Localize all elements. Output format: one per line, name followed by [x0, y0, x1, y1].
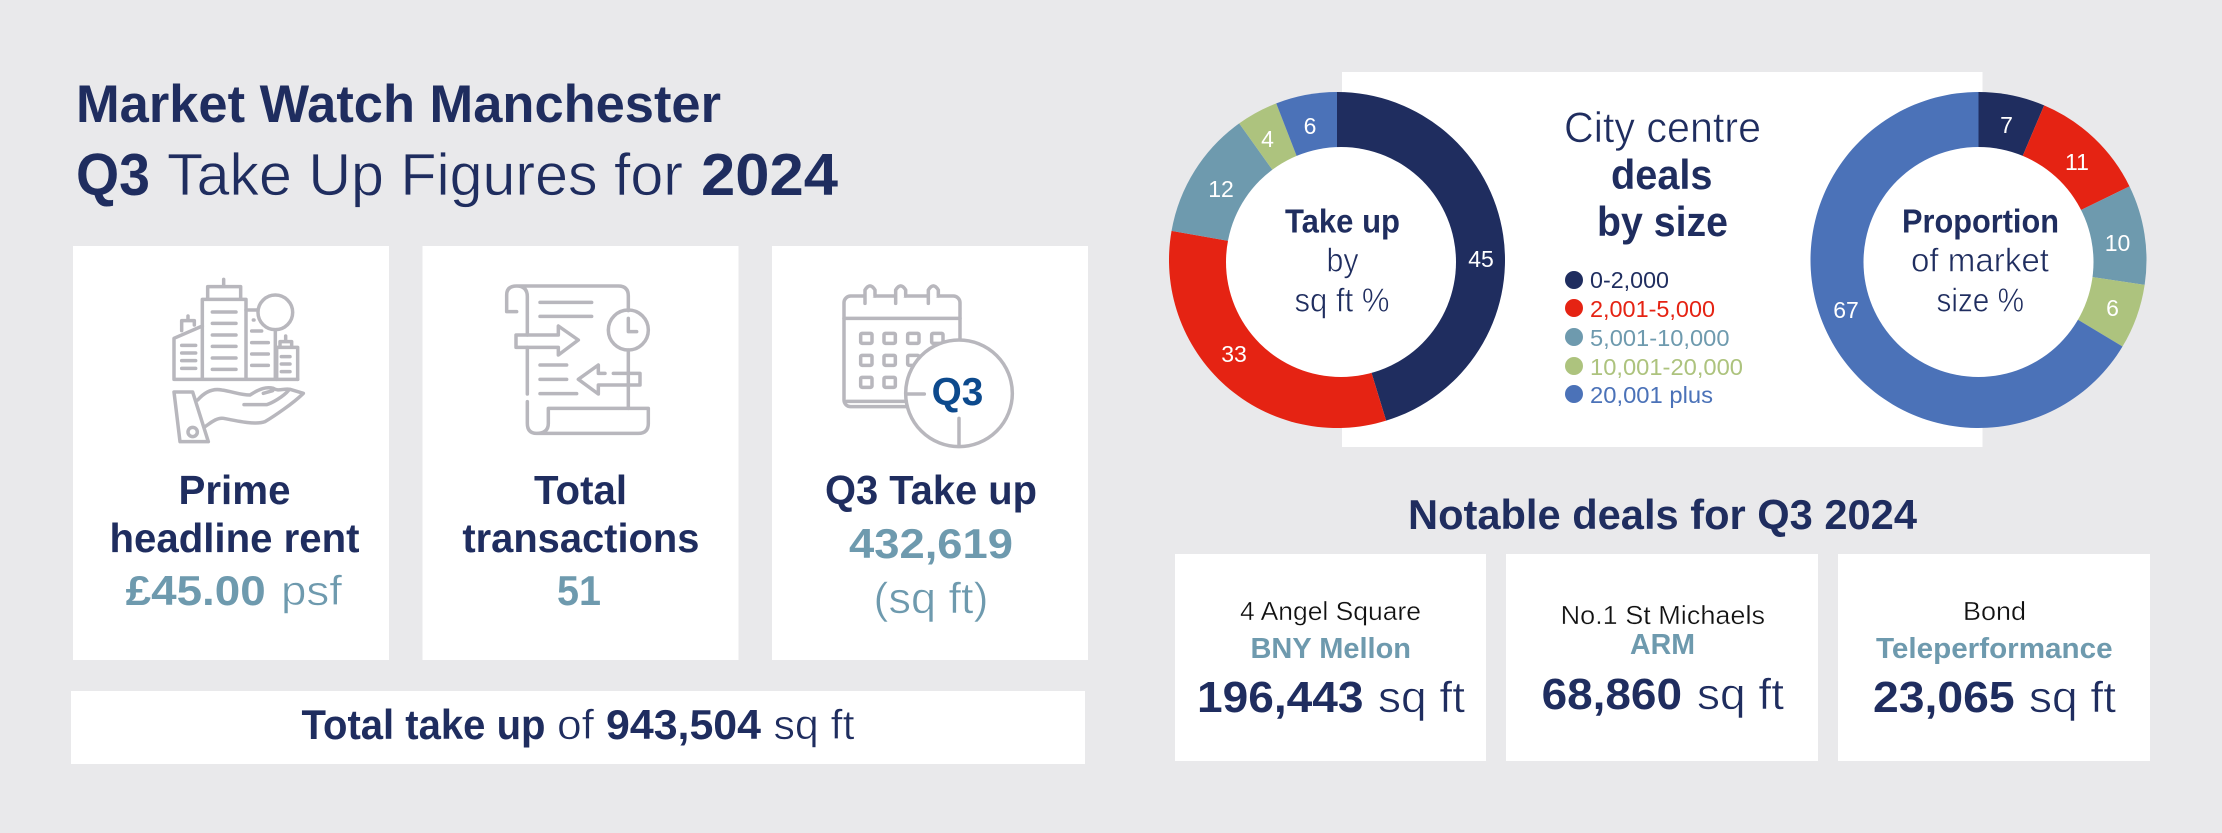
total take up banner: Total take up	[302, 701, 546, 748]
panel: deal 4 Angel Square: 4 Angel Square	[1240, 596, 1421, 626]
panel: prime headline rent	[73, 246, 389, 660]
panel: deal 4 Angel Square: sq ft	[1378, 673, 1465, 722]
panel: deal No.1 St Michaels: 68,860	[1542, 670, 1682, 719]
card text: total transactions: transactions	[462, 515, 699, 561]
card text: Q3 take up	[825, 467, 1037, 623]
total take up banner: of	[557, 701, 594, 748]
legend: 5,001-10,000	[1590, 325, 1730, 351]
panel heading	[1564, 104, 1761, 245]
donut chart: proportion of market size: 6	[2106, 295, 2119, 321]
panel: deal Bond: Teleperformance	[1876, 633, 2113, 665]
card text: total transactions: Total	[534, 467, 627, 513]
donut chart: take up by sq ft: 6	[1304, 113, 1316, 139]
donut centre label: take up	[1285, 202, 1400, 318]
card text: prime headline rent: psf	[281, 567, 342, 614]
card text: Q3 take up: 432,619	[849, 520, 1013, 567]
panel heading: deals	[1611, 151, 1712, 198]
title: Q3	[76, 142, 150, 208]
donut chart: proportion of market size: 10	[2105, 230, 2130, 256]
panel: deal Bond: Bond	[1963, 596, 2026, 626]
card text: Q3 take up: (sq ft)	[874, 574, 988, 623]
panel: deal No.1 St Michaels: ARM	[1630, 629, 1695, 661]
panel: city centre deals by size	[1342, 72, 1982, 447]
total take up banner: 943,504	[606, 701, 762, 748]
panel heading: City centre	[1564, 104, 1761, 152]
card text: total transactions	[462, 467, 699, 614]
donut chart: take up by sq ft: 12	[1208, 176, 1234, 202]
panel heading: by size	[1597, 198, 1728, 245]
total take up banner	[71, 691, 1085, 764]
donut chart: proportion of market size: 11	[2065, 149, 2089, 175]
donut chart: take up by sq ft	[1169, 92, 1505, 428]
title: 2024	[701, 142, 838, 208]
donut centre label: proportion: size %	[1936, 282, 2024, 318]
icon: document with arrows and clock	[507, 286, 648, 433]
panel: deal Bond: sq ft	[2029, 673, 2116, 722]
donut chart: take up by sq ft: 4	[1261, 126, 1274, 152]
panel: total transactions	[422, 246, 738, 660]
title	[76, 75, 838, 208]
panel: deal Bond	[1838, 554, 2150, 761]
legend: 0-2,000	[1590, 267, 1669, 293]
total take up banner: sq ft	[774, 701, 855, 748]
donut centre label: proportion: of market	[1911, 242, 2049, 278]
icon: calendar with Q3 badge: Q3	[932, 371, 983, 414]
donut centre label: proportion: Proportion	[1902, 202, 2059, 240]
donut chart: take up by sq ft: 45	[1468, 246, 1494, 272]
title: Take Up Figures for	[167, 142, 683, 208]
donut centre label: proportion	[1902, 202, 2059, 318]
panel: deal No.1 St Michaels	[1506, 554, 1818, 761]
legend: 20,001 plus	[1590, 382, 1713, 408]
donut centre label: take up: sq ft %	[1294, 282, 1390, 318]
panel: deal 4 Angel Square: BNY Mellon	[1250, 633, 1411, 665]
donut centre label: take up: Take up	[1285, 202, 1400, 240]
card text: prime headline rent: Prime	[178, 467, 290, 513]
panel: deal Bond: 23,065	[1873, 673, 2015, 722]
card text: Q3 take up: Q3 Take up	[825, 467, 1037, 513]
card text: prime headline rent	[110, 467, 360, 614]
donut centre label: take up: by	[1326, 242, 1359, 278]
heading: notable deals: Notable deals for Q3 2024	[1408, 491, 1918, 538]
icon: buildings on a hand	[174, 279, 303, 442]
legend: 2,001-5,000	[1590, 296, 1715, 322]
panel: deal No.1 St Michaels: No.1 St Michaels	[1561, 600, 1765, 630]
legend: 10,001-20,000	[1590, 354, 1743, 380]
card text: prime headline rent: headline rent	[110, 515, 360, 561]
panel: deal 4 Angel Square	[1175, 554, 1486, 761]
title: Market Watch Manchester	[76, 75, 721, 134]
icon: calendar with Q3 badge	[844, 286, 1012, 447]
legend	[1565, 267, 1743, 408]
card text: prime headline rent: £45.00	[126, 567, 266, 614]
panel: deal 4 Angel Square: 196,443	[1197, 673, 1364, 722]
donut chart: proportion of market size: 67	[1833, 297, 1859, 323]
panel: Q3 take up	[772, 246, 1088, 660]
donut chart: take up by sq ft: 33	[1221, 341, 1247, 367]
donut chart: proportion of market size	[1810, 92, 2146, 428]
card text: total transactions: 51	[557, 567, 601, 614]
donut chart: proportion of market size: 7	[2000, 112, 2013, 138]
panel: deal No.1 St Michaels: sq ft	[1697, 670, 1784, 719]
